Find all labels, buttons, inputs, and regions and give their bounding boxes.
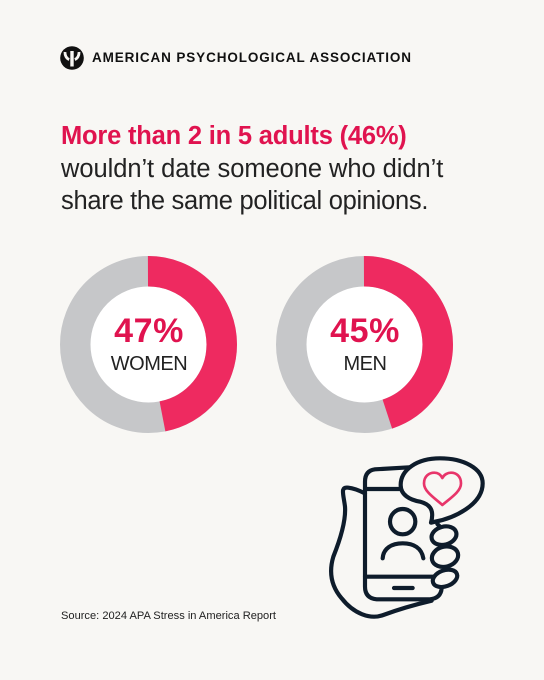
source note: Source: 2024 APA Stress in America Report (61, 610, 276, 622)
donut chart: men (276, 256, 453, 433)
icon: psi logo (60, 46, 84, 70)
donut chart: women (60, 256, 237, 433)
header: organization logo and name (60, 46, 412, 70)
title highlight: More than 2 in 5 adults (46%) (61, 122, 407, 150)
icon: hand holding phone with heart speech bubble (329, 456, 485, 619)
label: men: MEN (344, 353, 386, 375)
title line two: wouldn’t date someone who didn’t (61, 155, 443, 183)
title (61, 122, 444, 215)
label: women: WOMEN (111, 353, 187, 375)
value: 45%: 45% (330, 312, 400, 350)
value: 47%: 47% (114, 312, 184, 350)
title line three: share the same political opinions. (61, 187, 428, 215)
organization name: AMERICAN PSYCHOLOGICAL ASSOCIATION (92, 50, 412, 65)
